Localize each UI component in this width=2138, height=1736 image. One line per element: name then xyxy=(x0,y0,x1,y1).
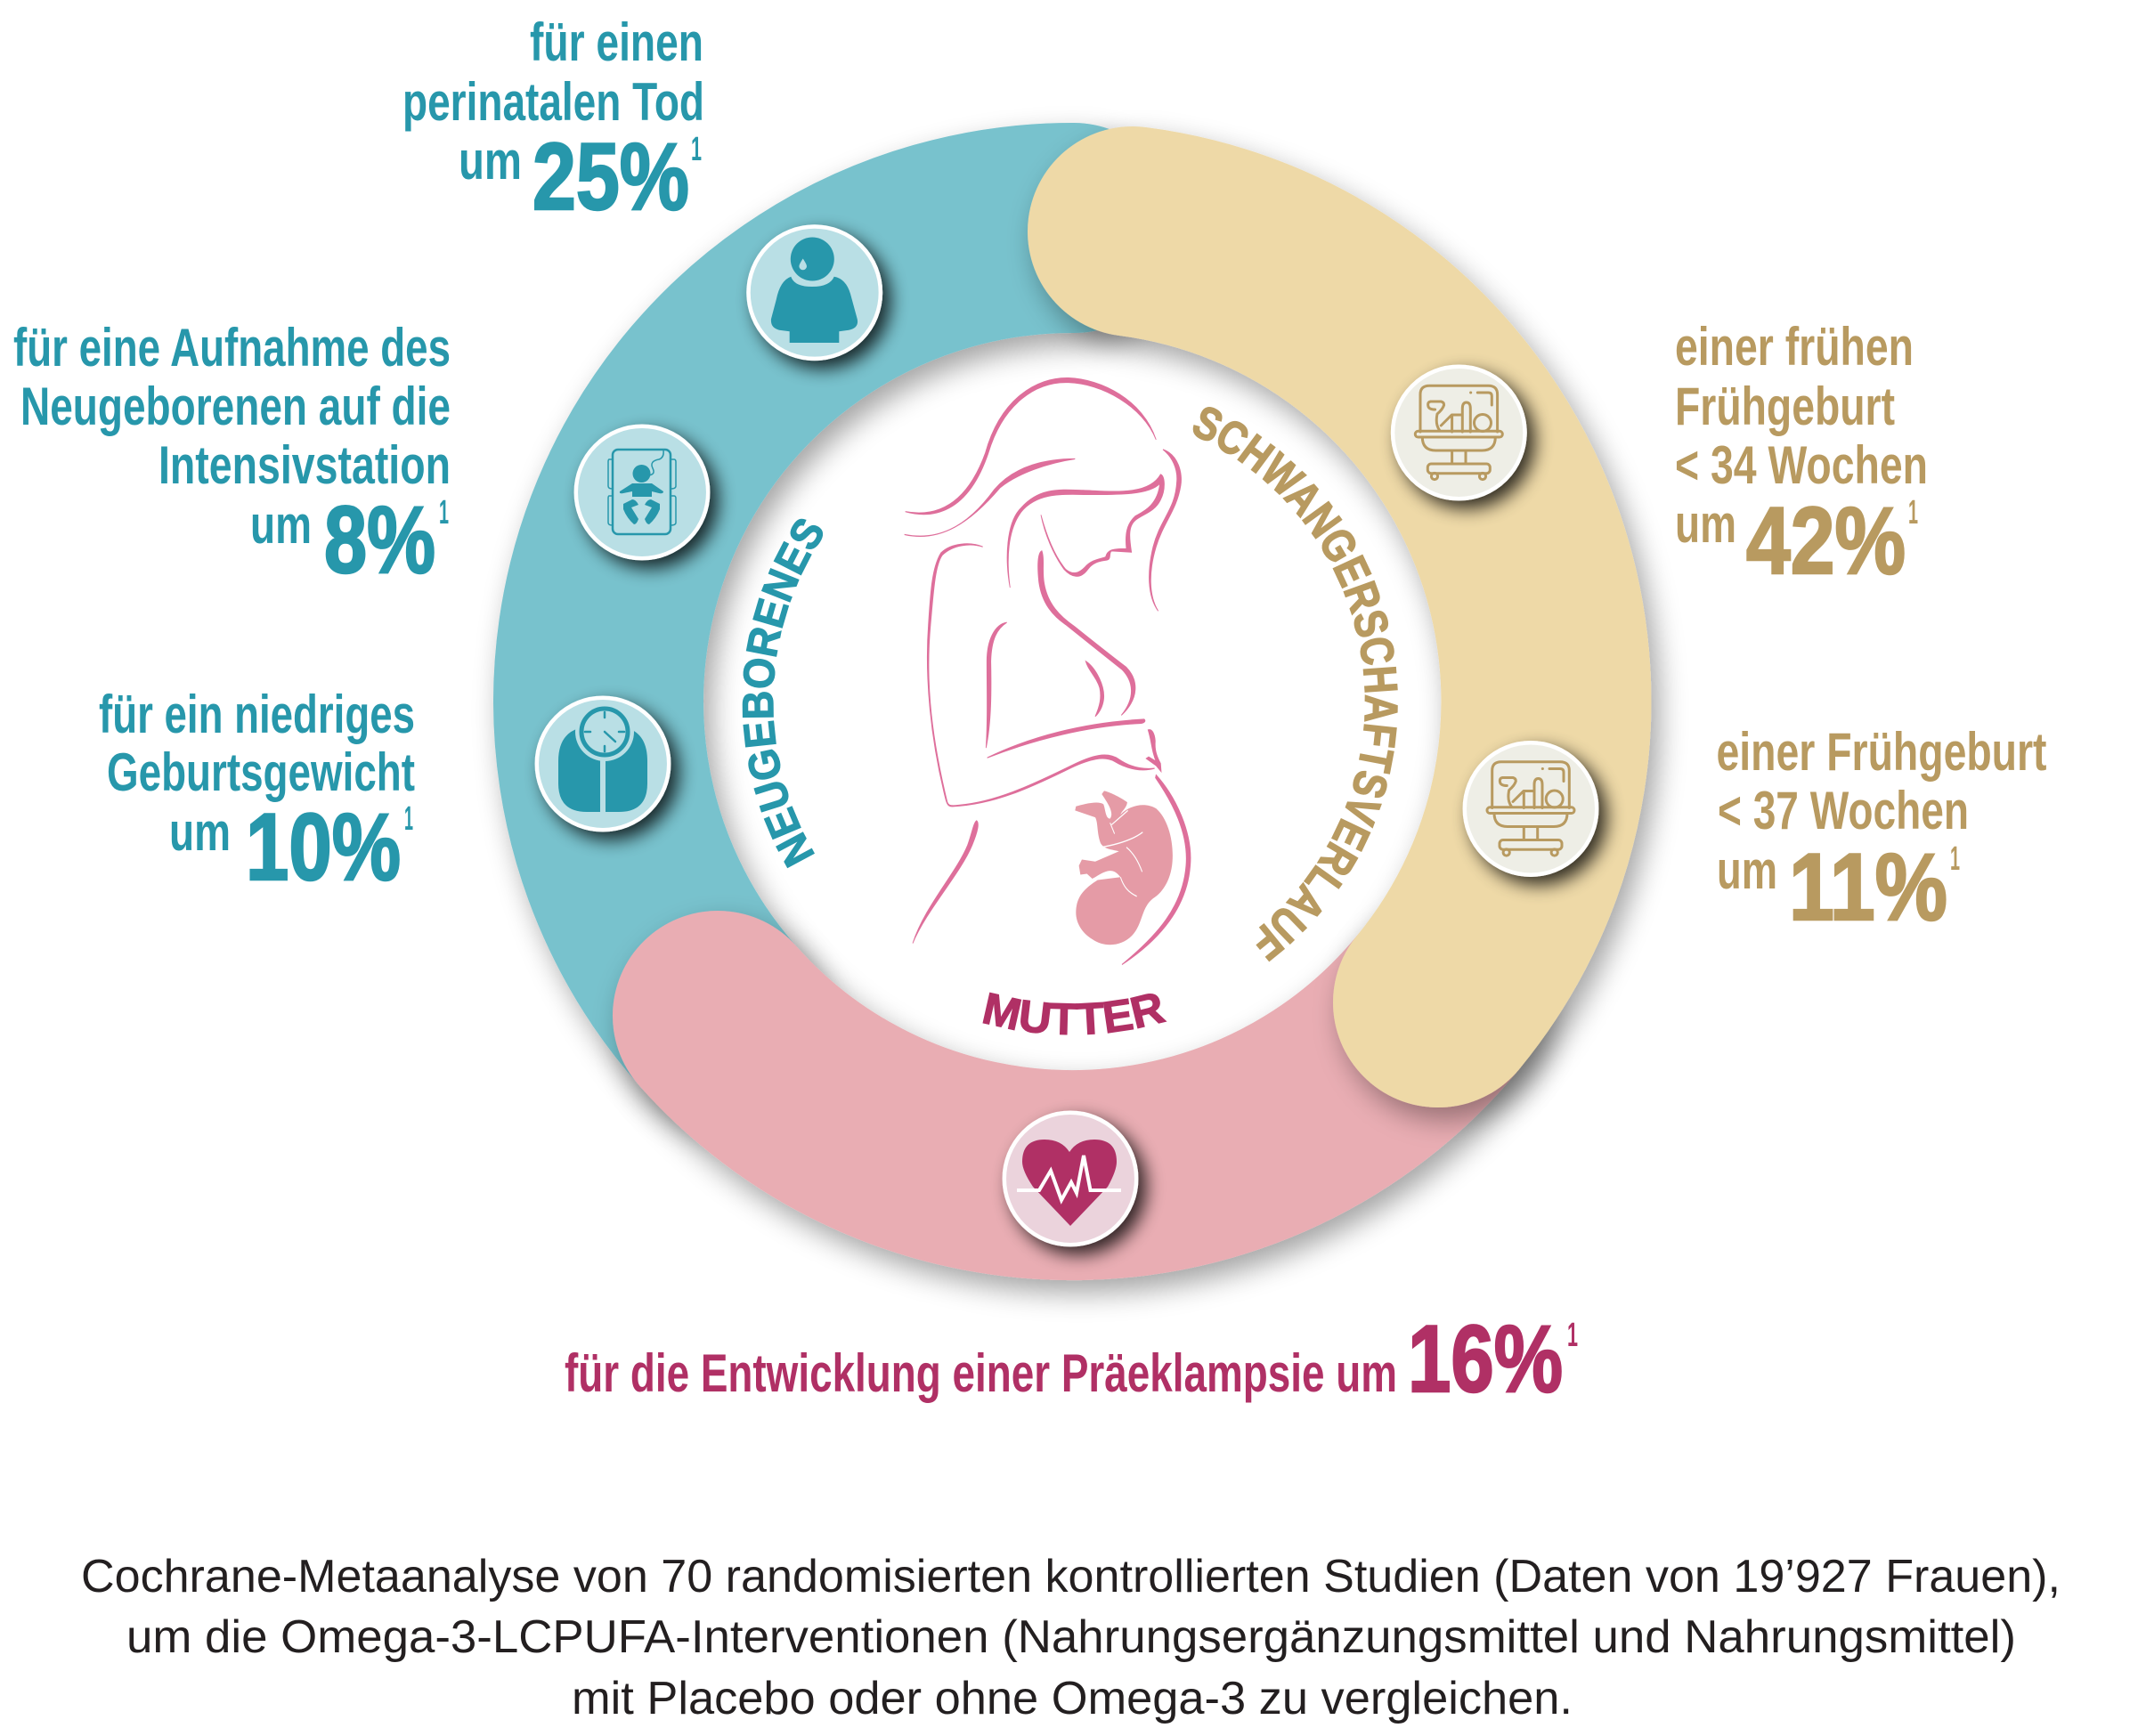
statistic: preterm birth: 11% xyxy=(1789,833,1947,940)
statistic: NICU admission: Intensivstation xyxy=(159,435,451,495)
statistic: early preterm birth: < 34 Wochen xyxy=(1675,435,1928,495)
statistic: low birth weight: 1 xyxy=(404,800,413,838)
statistic: perinatal death: perinatalen Tod xyxy=(402,72,704,132)
statistic: NICU admission: 8% xyxy=(324,486,435,593)
icon: incubator early preterm birth xyxy=(1393,367,1525,499)
statistic: preterm birth xyxy=(1717,722,2047,940)
footnote: study description: mit Placebo oder ohne Omega-3 zu vergleichen. xyxy=(572,1673,1573,1724)
statistic: NICU admission: für eine Aufnahme des xyxy=(13,318,451,377)
icon: weighing scale xyxy=(537,698,669,830)
statistic: low birth weight: um xyxy=(169,802,231,862)
curved label: Neugeborenes: NEUGEBORENES xyxy=(743,518,823,869)
statistic: early preterm birth: Frühgeburt xyxy=(1675,377,1895,436)
icon: newborn in intensive care bed xyxy=(576,426,708,558)
statistic: NICU admission: Neugeborenen auf die xyxy=(20,377,451,436)
statistic: early preterm birth: um xyxy=(1675,494,1736,554)
statistic: low birth weight: für ein niedriges xyxy=(99,685,415,744)
ring: pregnancy segment xyxy=(1133,231,1546,1002)
statistic: preterm birth: einer Frühgeburt xyxy=(1717,722,2047,782)
statistic: perinatal death: 25% xyxy=(532,123,689,230)
ring: newborn segment xyxy=(598,228,1074,1016)
statistic: preterm birth: 1 xyxy=(1950,840,1960,878)
statistic: pre-eclampsia: 1 xyxy=(1567,1317,1578,1354)
statistic: perinatal death: 1 xyxy=(691,131,702,168)
statistic: low birth weight: 10% xyxy=(246,793,401,900)
statistic: pre-eclampsia: für die Entwicklung einer Präeklampsie um xyxy=(565,1343,1397,1403)
statistic: NICU admission xyxy=(13,318,451,593)
footnote: study description xyxy=(81,1551,2061,1724)
statistic: low birth weight: Geburtsgewicht xyxy=(107,742,415,802)
statistic: early preterm birth xyxy=(1675,317,1928,594)
statistic: early preterm birth: einer frühen xyxy=(1675,317,1914,377)
statistic: pre-eclampsia xyxy=(565,1305,1578,1412)
statistic: NICU admission: 1 xyxy=(439,494,449,531)
statistic: low birth weight xyxy=(99,685,415,900)
footnote: study description: Cochrane-Metaanalyse von 70 randomisierten kontrollierten Studien (Daten von 19’927 Frauen), xyxy=(81,1551,2061,1602)
illustration: pregnant woman xyxy=(905,378,1191,964)
statistic: early preterm birth: 42% xyxy=(1746,487,1906,594)
statistic: preterm birth: < 37 Wochen xyxy=(1718,781,1969,840)
curved label: Schwangerschaftsverlauf: SCHWANGERSCHAFTSVERLAUF xyxy=(1193,407,1398,961)
footnote: study description: um die Omega-3-LCPUFA-Interventionen (Nahrungsergänzungsmittel und Nahrungsmittel) xyxy=(126,1611,2016,1663)
illustration: fetus xyxy=(1075,791,1173,945)
statistic: perinatal death: für einen xyxy=(530,12,703,72)
statistic: pre-eclampsia: 16% xyxy=(1408,1305,1563,1412)
curved label: Mutter: MUTTER xyxy=(983,992,1167,1034)
statistic: early preterm birth: 1 xyxy=(1908,494,1918,531)
icon: grieving person xyxy=(748,227,881,359)
statistic: preterm birth: um xyxy=(1717,840,1777,900)
ring: mother segment xyxy=(718,1002,1438,1175)
icon: heart with heartbeat xyxy=(1004,1113,1136,1245)
icon: incubator preterm birth xyxy=(1465,742,1597,875)
statistic: NICU admission: um xyxy=(250,495,312,555)
statistic: perinatal death: um xyxy=(459,131,522,191)
statistic: perinatal death xyxy=(402,12,704,230)
